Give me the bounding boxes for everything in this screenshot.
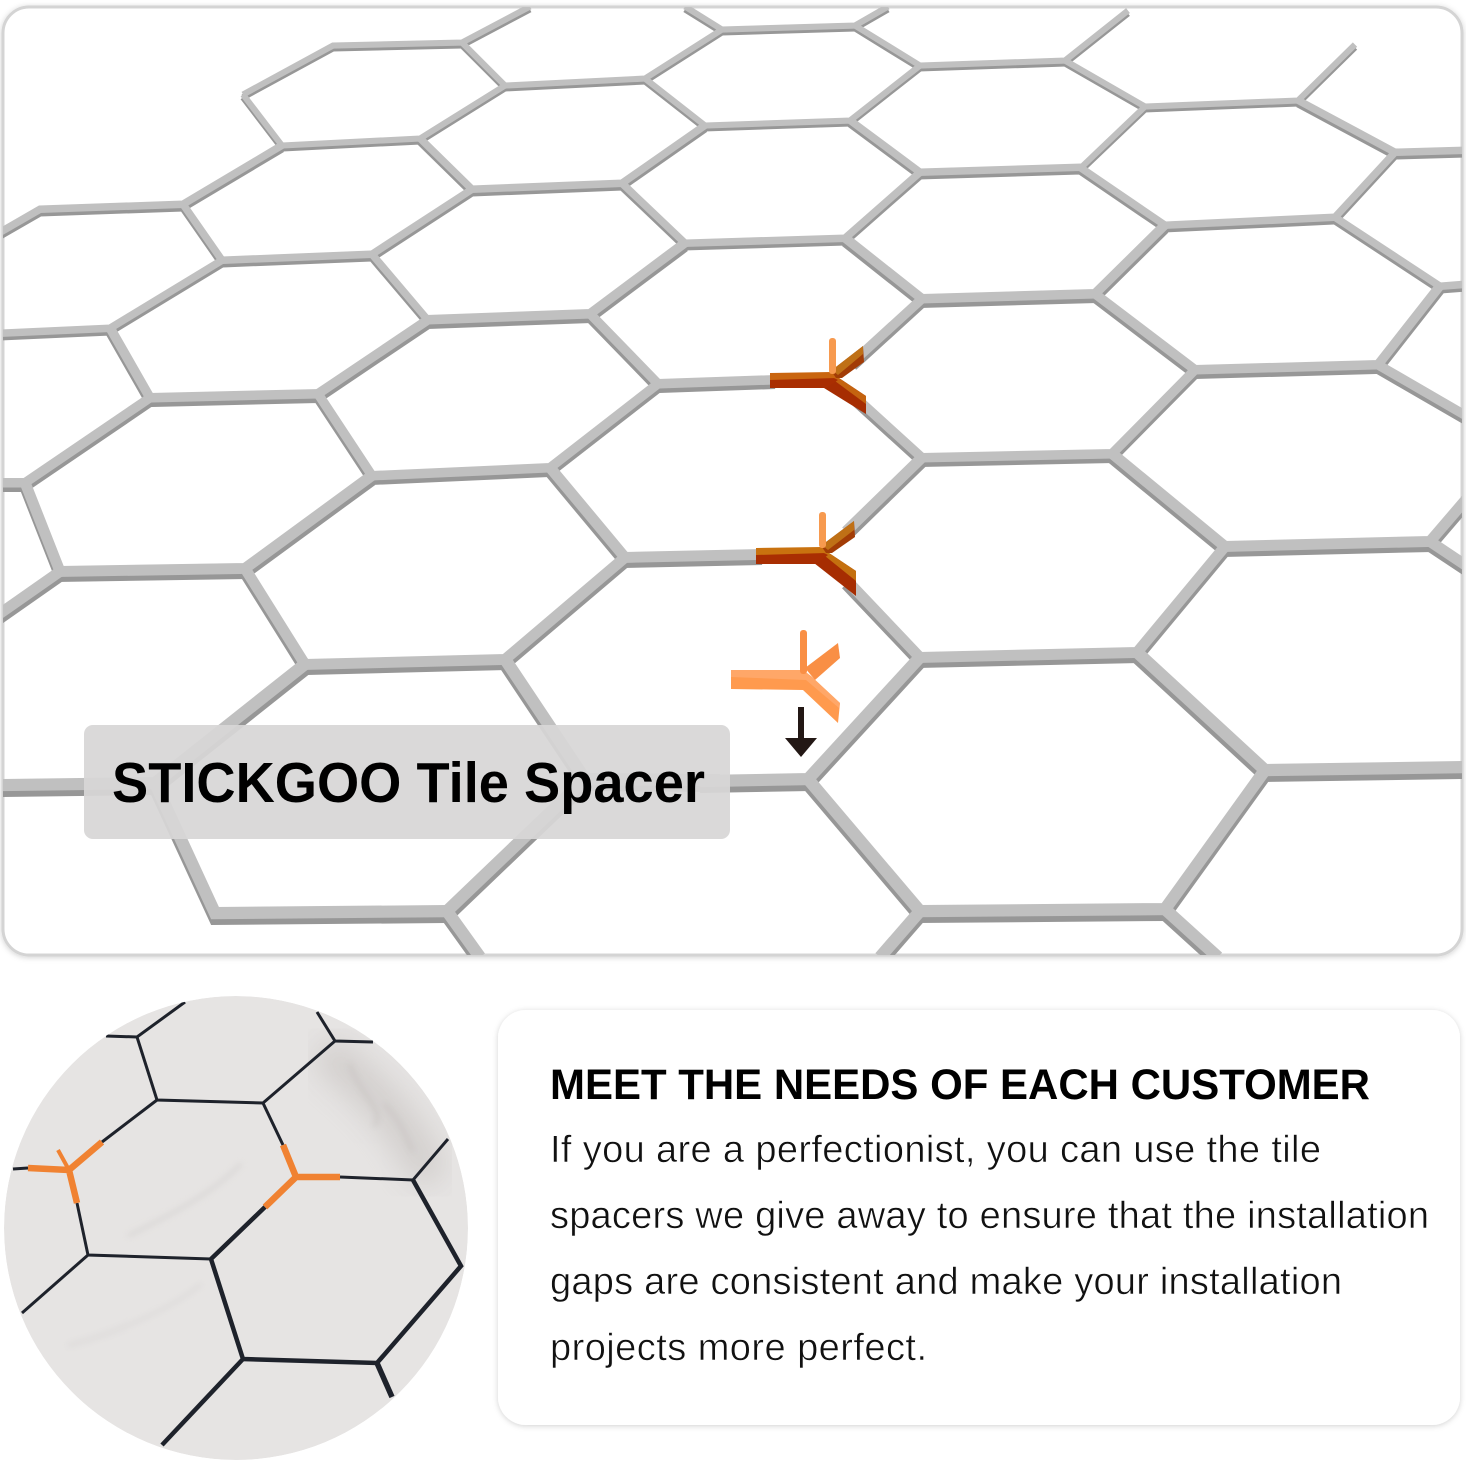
tile gaps [13,1002,461,1445]
body text [550,1129,1429,1369]
panel: hexagon tile layout [0,7,1466,963]
heading: MEET THE NEEDS OF EACH CUSTOMER [550,1061,1370,1109]
orange spacers in tile joints [28,1142,340,1207]
hexagon grid lines [0,7,1466,963]
label: product name [84,725,730,839]
marble veining [70,1060,425,1345]
body text: gaps are consistent and make your installation [550,1261,1342,1303]
photo: installed hexagon tiles [4,996,468,1460]
arrow: spacer goes down [785,707,817,757]
panel: customer needs card [498,1010,1460,1425]
body text: projects more perfect. [550,1327,927,1369]
spacer inserted in upper joint [770,338,866,414]
body text: If you are a perfectionist, you can use the tile [550,1129,1321,1171]
body text: spacers we give away to ensure that the installation [550,1195,1429,1237]
label: product name: STICKGOO Tile Spacer [112,751,705,815]
spacer inserted in middle joint [756,512,856,596]
spacer above joint [731,630,840,723]
